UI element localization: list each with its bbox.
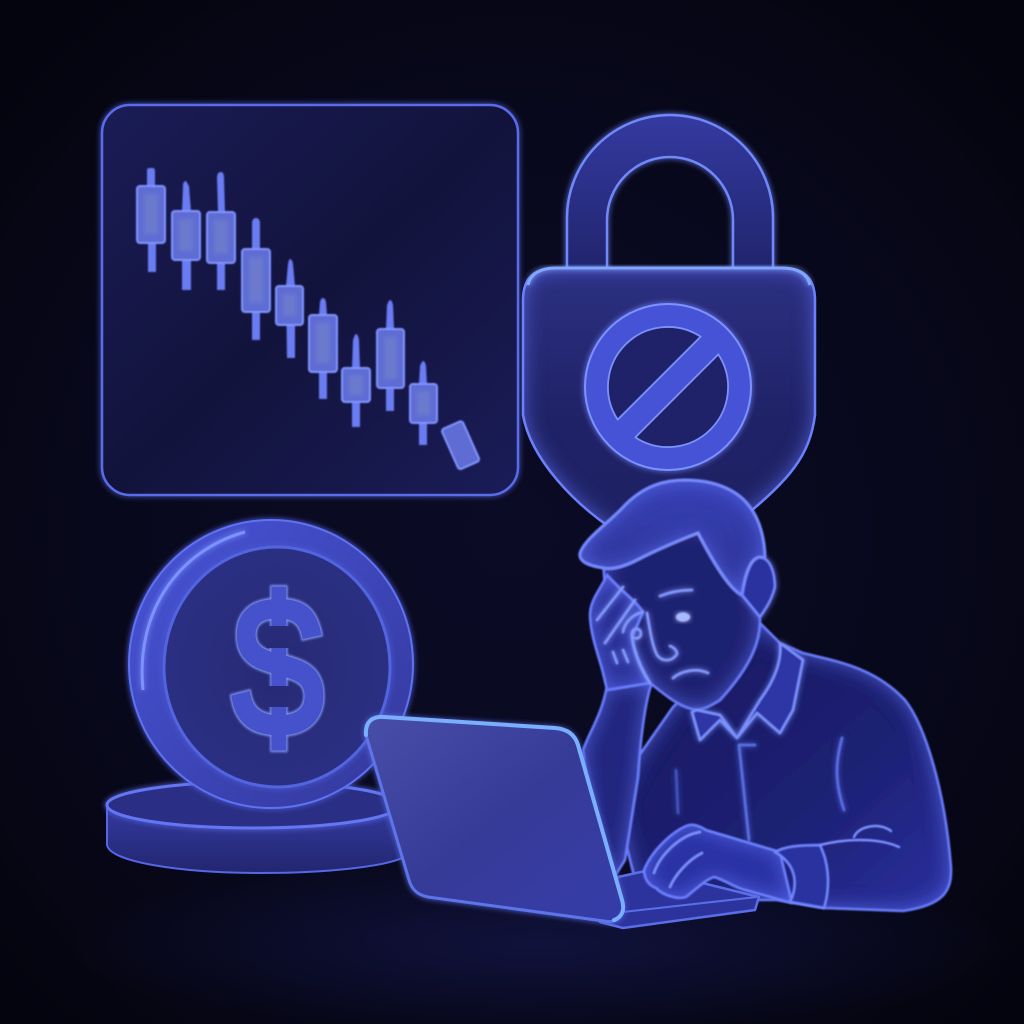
cuff and elbow lines [820,826,899,847]
prohibition sign [584,303,752,471]
eye [676,612,690,622]
collar [692,643,803,740]
hair [580,480,765,595]
padlock shackle [567,115,773,272]
keyboard edge [623,897,757,912]
candlesticks [137,168,480,470]
icon: padlock with prohibition sign [523,115,815,550]
torso [615,623,951,911]
padlock body [523,268,815,550]
hand on keyboard [644,825,792,903]
laptop screen highlight [366,717,623,920]
face details [597,587,708,683]
shirt lines [676,738,844,840]
icon: coin on base [107,520,413,873]
sleeve cuff [775,845,828,908]
typing hand and sleeve [644,825,899,908]
lock top highlight [528,268,810,285]
coin base disc [107,782,402,873]
face [603,525,760,710]
left arm [583,683,652,900]
panel: falling candlestick chart [102,105,518,495]
chart frame [102,105,518,495]
figure: stressed man [580,480,951,911]
dollar sign: $ [232,559,324,776]
laptop screen [366,717,623,922]
dollar sign: $ [232,559,324,776]
laptop base [600,870,759,928]
ear [742,557,775,617]
coin [129,520,413,808]
laptop [366,717,759,928]
hand on forehead [590,575,650,690]
finger lines [654,832,702,887]
floor glow [70,855,1010,1024]
